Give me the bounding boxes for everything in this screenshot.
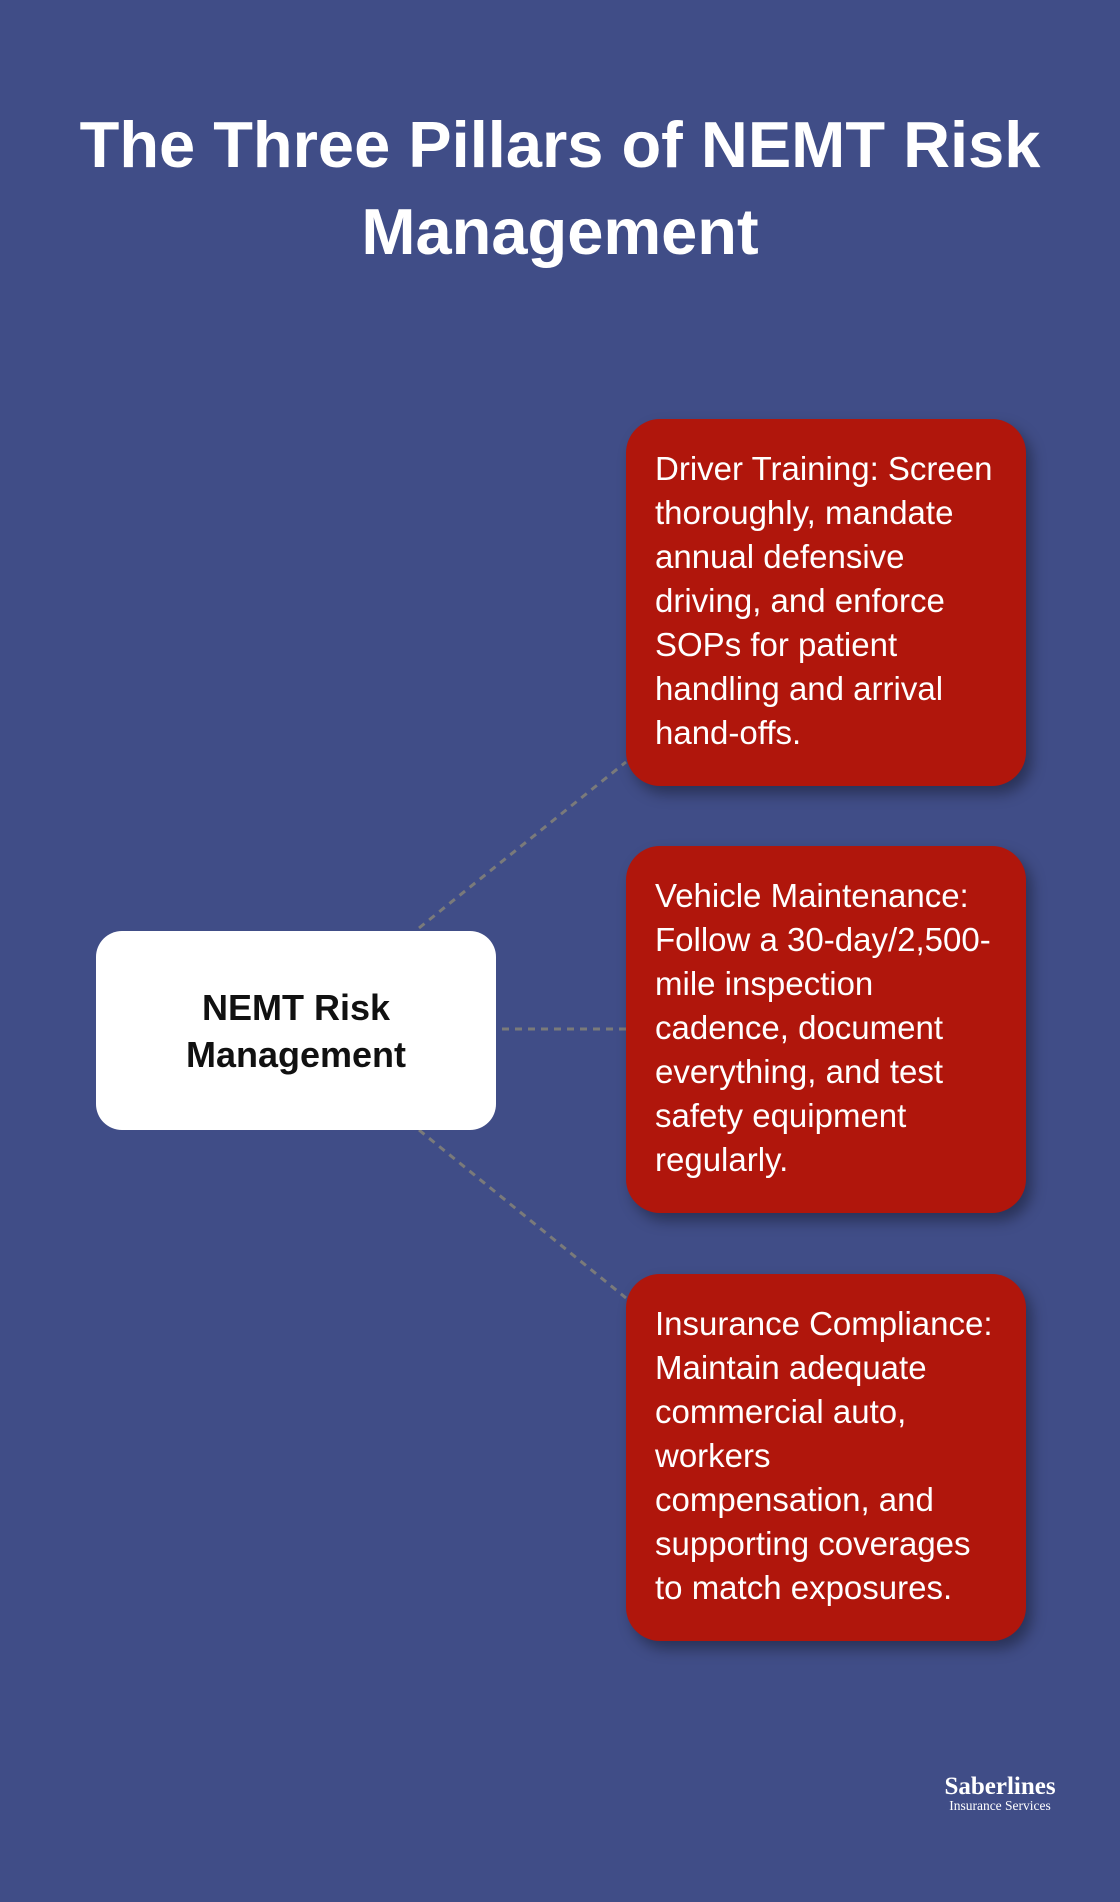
card: driver training: SOPs for patient — [655, 626, 897, 663]
card: vehicle maintenance: mile inspection — [655, 965, 873, 1002]
card: vehicle maintenance: safety equipment — [655, 1097, 906, 1134]
card: vehicle maintenance: Follow a 30-day/2,500- — [655, 921, 991, 958]
title: Management — [361, 195, 759, 268]
center box — [96, 931, 496, 1130]
card: vehicle maintenance: regularly. — [655, 1141, 788, 1178]
card: insurance compliance: workers — [655, 1437, 771, 1474]
center box: NEMT Risk — [202, 986, 390, 1028]
logo: Saberlines — [944, 1773, 1056, 1800]
card: insurance compliance: commercial auto, — [655, 1393, 906, 1430]
card: driver training: thoroughly, mandate — [655, 494, 953, 531]
card: vehicle maintenance: Vehicle Maintenance: — [655, 877, 969, 914]
card: insurance compliance: supporting coverages — [655, 1525, 971, 1562]
card: vehicle maintenance: cadence, document — [655, 1009, 943, 1046]
card: insurance compliance: Maintain adequate — [655, 1349, 927, 1386]
card: driver training: annual defensive — [655, 538, 905, 575]
title — [80, 108, 1040, 268]
card: driver training: driving, and enforce — [655, 582, 945, 619]
card: vehicle maintenance: everything, and test — [655, 1053, 943, 1090]
card: driver training: handling and arrival — [655, 670, 943, 707]
card: driver training — [626, 419, 1026, 786]
card: insurance compliance: to match exposures. — [655, 1569, 952, 1606]
card: insurance compliance: Insurance Compliance: — [655, 1305, 993, 1342]
center box: Management — [186, 1034, 406, 1074]
logo: Insurance Services — [949, 1798, 1051, 1813]
card: driver training: hand-offs. — [655, 714, 801, 751]
card: insurance compliance — [626, 1274, 1026, 1641]
card: insurance compliance: compensation, and — [655, 1481, 934, 1518]
logo — [944, 1773, 1056, 1813]
card: vehicle maintenance — [626, 846, 1026, 1213]
title: The Three Pillars of NEMT Risk — [80, 108, 1040, 181]
card: driver training: Driver Training: Screen — [655, 450, 992, 487]
